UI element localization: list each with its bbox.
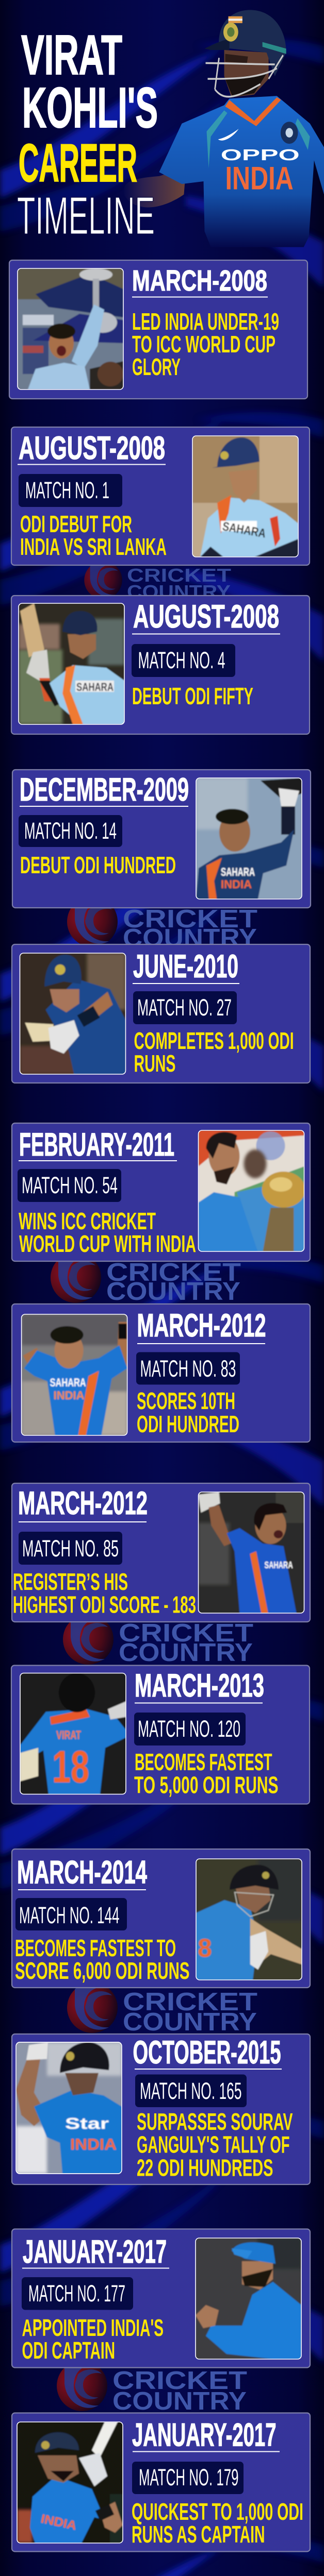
milestone description: INDIA VS SRI LANKA — [20, 533, 167, 560]
photo: running between wickets — [196, 1859, 302, 1980]
panel: January 2017 quickest to 1,000 — [12, 2413, 310, 2551]
milestone description — [20, 511, 167, 560]
photo: celebrating first hundred — [196, 778, 302, 899]
panel: December 2009 — [12, 770, 311, 908]
panel: March 2014 — [12, 1849, 310, 1988]
logo: Cricket Country watermark 6 — [57, 2360, 247, 2415]
match number pill: MATCH NO. 83 — [140, 1355, 236, 1382]
logo: Cricket Country watermark 5: COUNTRY — [123, 2008, 257, 2036]
date heading: JANUARY-2017 — [23, 2234, 167, 2270]
photo: raising bat: SAHARA — [76, 681, 114, 693]
photo: arms raised: SAHARA — [50, 1376, 86, 1389]
logo: Cricket Country watermark 4: COUNTRY — [119, 1639, 253, 1667]
photo: back of jersey number 18: VIRAT — [56, 1728, 81, 1741]
photo: celebrating first hundred: INDIA — [221, 878, 252, 891]
milestone description: BECOMES FASTEST TO — [15, 1935, 176, 1961]
match number pill — [132, 2462, 244, 2494]
milestone description: SCORES 10TH — [137, 1387, 235, 1414]
title: Virat Kohli's Career Timeline: TIMELINE — [17, 186, 155, 245]
photo: raising bat — [19, 603, 124, 724]
logo: Cricket Country watermark 6: COUNTRY — [112, 2387, 247, 2415]
logo: Cricket Country watermark 4 — [63, 1614, 253, 1667]
hero illustration: Virat Kohli in helmet and India jersey: OPPO — [221, 146, 300, 164]
match number pill — [132, 644, 235, 677]
milestone description: ODI DEBUT FOR — [20, 511, 132, 537]
logo: Cricket Country watermark 3 — [51, 1252, 241, 1306]
milestone description — [134, 1027, 294, 1077]
milestone description: ODI HUNDRED — [137, 1411, 239, 1437]
panel: March 2008 — [9, 260, 307, 399]
milestone description: HIGHEST ODI SCORE - 183 — [13, 1591, 196, 1618]
panel: February 2011 — [12, 1123, 310, 1261]
photo: batting drive — [20, 953, 126, 1074]
match number pill: MATCH NO. 4 — [138, 647, 225, 673]
logo: Cricket Country watermark 3: COUNTRY — [106, 1278, 240, 1306]
match number pill — [19, 1532, 122, 1565]
logo: Cricket Country watermark 1: COUNTRY — [127, 581, 231, 602]
photo: batting shot in Oppo jersey — [17, 2422, 123, 2543]
panel: August 2008 debut fifty — [11, 596, 310, 734]
logo: Cricket Country watermark 3: CRICKET — [106, 1259, 241, 1286]
photo: roaring with bat raised: SAHARA — [264, 1560, 293, 1570]
milestone description — [15, 1935, 190, 1984]
logo: Cricket Country watermark 2: CRICKET — [123, 905, 257, 933]
date heading: FEBRUARY-2011 — [19, 1127, 174, 1163]
panel: January 2017 appointed captain — [12, 2229, 310, 2368]
date heading: JUNE-2010 — [133, 948, 238, 985]
milestone description — [13, 1568, 196, 1618]
milestone description — [134, 1749, 279, 1798]
panel: March 2012 highest score — [12, 1483, 310, 1622]
match number pill — [19, 815, 122, 847]
panel: March 2012 10th hundred — [12, 1304, 310, 1442]
match number pill — [15, 1898, 127, 1930]
photo: fielding in blue cap — [196, 2238, 301, 2359]
match number pill: MATCH NO. 14 — [24, 818, 117, 844]
hero illustration: Virat Kohli in helmet and India jersey: INDIA — [225, 160, 294, 196]
match number pill: MATCH NO. 144 — [19, 1902, 120, 1928]
panel: October 2015 — [12, 2034, 310, 2184]
photo: holding under-19 trophy — [18, 268, 123, 389]
photo: holding World Cup trophy — [198, 1130, 305, 1251]
match number pill — [22, 2277, 133, 2310]
logo: Cricket Country watermark 1 — [84, 561, 231, 602]
match number pill: MATCH NO. 27 — [137, 994, 232, 1021]
title: Virat Kohli's Career Timeline — [17, 24, 158, 245]
date heading: AUGUST-2008 — [19, 430, 165, 466]
milestone description — [132, 308, 279, 380]
milestone description — [19, 1208, 196, 1257]
date heading: MARCH-2012 — [18, 1485, 148, 1521]
photo: helmet raised in celebration — [16, 2042, 122, 2174]
panel: June 2010 — [12, 944, 310, 1083]
milestone description: ODI CAPTAIN — [22, 2337, 115, 2364]
milestone description — [132, 2498, 303, 2548]
milestone description: WORLD CUP WITH INDIA — [19, 1230, 196, 1257]
match number pill — [18, 1169, 121, 1202]
photo: roaring with bat raised — [198, 1492, 304, 1613]
milestone description — [22, 2314, 164, 2364]
match number pill — [135, 2074, 247, 2107]
match number pill: MATCH NO. 179 — [139, 2464, 238, 2490]
photo: helmet raised in celebration: INDIA — [70, 2136, 117, 2154]
match number pill: MATCH NO. 85 — [22, 1535, 119, 1562]
photo: back of jersey number 18: 18 — [52, 1741, 89, 1792]
photo: celebrating first hundred: SAHARA — [221, 866, 255, 878]
milestone description: APPOINTED INDIA'S — [22, 2314, 164, 2341]
date heading: MARCH-2008 — [132, 264, 267, 297]
logo: Cricket Country watermark 5 — [67, 1981, 257, 2036]
milestone description: SCORE 6,000 ODI RUNS — [15, 1957, 190, 1984]
milestone description: WINS ICC CRICKET — [19, 1208, 156, 1234]
match number pill — [133, 991, 237, 1024]
photo: batting shot in Oppo jersey: INDIA — [40, 2512, 78, 2533]
photo: helmet raised in celebration: Star — [65, 2115, 109, 2132]
logo: Cricket Country watermark 2: COUNTRY — [123, 924, 257, 952]
photo: arms raised: INDIA — [54, 1389, 85, 1402]
logo: Cricket Country watermark 1: CRICKET — [127, 565, 231, 586]
milestone description: REGISTER’S HIS — [13, 1568, 128, 1595]
milestone description: RUNS — [134, 1050, 175, 1077]
title: Virat Kohli's Career Timeline: CAREER — [19, 133, 137, 193]
match number pill: MATCH NO. 177 — [28, 2280, 125, 2307]
milestone description — [137, 1387, 239, 1437]
photo: walking out in helmet — [192, 436, 298, 557]
photo: walking out in helmet: SAHARA — [221, 519, 267, 541]
milestone description — [137, 2108, 293, 2181]
title: Virat Kohli's Career Timeline: VIRAT — [21, 24, 122, 87]
panel: March 2013 — [11, 1665, 310, 1804]
match number pill — [136, 1352, 240, 1385]
match number pill: MATCH NO. 165 — [140, 2078, 241, 2104]
milestone description: GLORY — [132, 353, 181, 380]
logo: Cricket Country watermark 4: CRICKET — [119, 1619, 253, 1647]
date heading: MARCH-2014 — [17, 1855, 147, 1891]
match number pill: MATCH NO. 120 — [138, 1716, 240, 1742]
milestone description: DEBUT ODI HUNDRED — [20, 852, 176, 878]
match number pill: MATCH NO. 54 — [22, 1172, 118, 1198]
photo: back of jersey number 18 — [20, 1673, 126, 1794]
photo: arms raised — [22, 1314, 127, 1435]
match number pill: MATCH NO. 1 — [25, 477, 109, 503]
hero illustration: Virat Kohli in helmet and India jersey — [123, 10, 324, 247]
match number pill — [134, 1713, 246, 1745]
logo: Cricket Country watermark 6: CRICKET — [112, 2367, 247, 2395]
logo: Cricket Country watermark 5: CRICKET — [123, 1988, 257, 2016]
title: Virat Kohli's Career Timeline: KOHLI'S — [22, 76, 158, 140]
photo: running between wickets: 8 — [198, 1934, 212, 1962]
match number pill — [19, 474, 122, 507]
panel: August 2008 ODI debut — [11, 427, 310, 565]
date heading: DECEMBER-2009 — [20, 772, 189, 808]
logo: Cricket Country watermark 2 — [67, 895, 257, 952]
